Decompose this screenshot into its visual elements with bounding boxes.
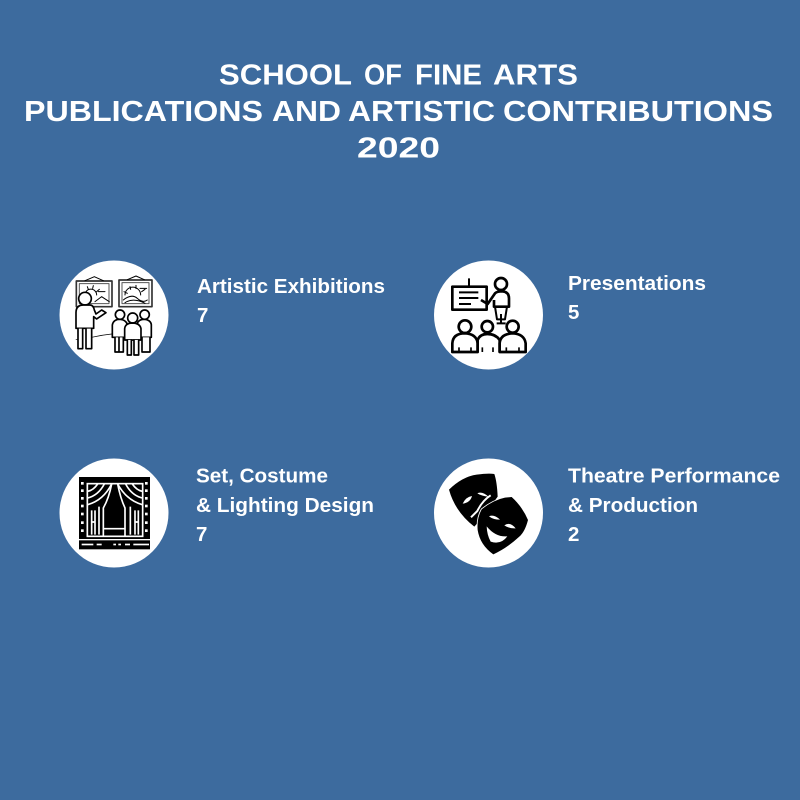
- label: artistic exhibitions: Artistic Exhibitions: [197, 275, 385, 298]
- panel: theatre performance and production: [434, 458, 780, 568]
- label: theatre performance and production: [568, 464, 780, 517]
- icon: theatre masks: [434, 458, 543, 568]
- label: set, costume and lighting design: [196, 464, 374, 517]
- value: artistic exhibitions: 7: [197, 304, 208, 327]
- value: theatre performance and production: 2: [568, 523, 579, 546]
- title: SCHOOL: [219, 60, 352, 92]
- title: ARTS: [493, 60, 578, 92]
- title: CONTRIBUTIONS: [503, 96, 773, 128]
- label: theatre performance and production: Theatre Performance: [568, 464, 780, 488]
- value: set, costume and lighting design: 7: [196, 523, 207, 546]
- title: ARTISTIC: [348, 96, 495, 128]
- title: PUBLICATIONS: [24, 96, 263, 128]
- title: OF: [364, 60, 402, 92]
- label: presentations: Presentations: [568, 272, 706, 295]
- panel: presentations: [434, 260, 706, 370]
- panel: artistic exhibitions: [60, 260, 385, 370]
- icon: presenter and audience: [434, 260, 543, 370]
- panel: set, costume and lighting design: [60, 458, 374, 568]
- icon: stage curtains: [60, 458, 168, 568]
- title: AND: [272, 96, 341, 128]
- icon: people viewing paintings: [60, 260, 168, 370]
- label: theatre performance and production: & Production: [568, 494, 698, 517]
- label: set, costume and lighting design: Set, Costume: [196, 464, 328, 488]
- label: set, costume and lighting design: & Lighting Design: [196, 494, 374, 517]
- title: [24, 60, 773, 164]
- title: 2020: [357, 132, 440, 164]
- title: FINE: [415, 60, 482, 92]
- value: presentations: 5: [568, 301, 579, 324]
